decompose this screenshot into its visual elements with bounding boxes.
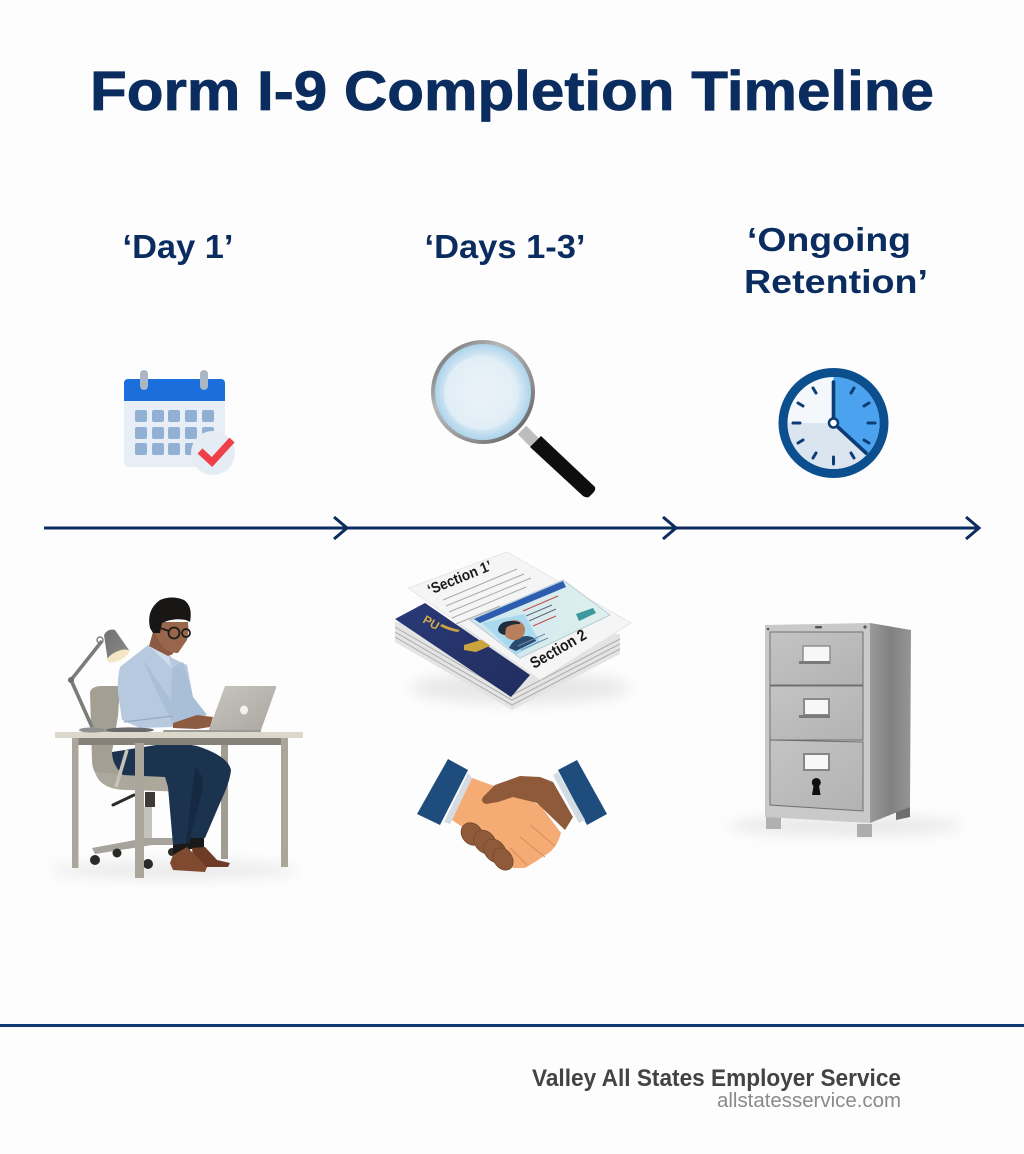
calendar header	[124, 379, 225, 401]
keyhole	[812, 778, 821, 795]
handle collar	[522, 430, 535, 443]
check badge	[191, 431, 235, 475]
clock face	[788, 377, 880, 469]
heading: Ongoing Retention	[744, 221, 928, 300]
back shoe	[192, 847, 230, 867]
passport lettering: PU	[420, 612, 442, 633]
middle label holder	[799, 699, 830, 718]
right shirt cuff	[553, 772, 585, 823]
illustration: stack of I-9 documents	[395, 552, 631, 710]
illustration: handshake	[417, 759, 607, 874]
heading: Day 1: ‘Day 1’	[122, 228, 234, 265]
section paper	[408, 552, 631, 680]
footer website: allstatesservice.com	[717, 1090, 901, 1112]
front shoe	[170, 847, 207, 872]
handle	[530, 436, 595, 497]
trousers	[112, 742, 231, 845]
hands on keyboard	[173, 715, 213, 729]
desk top	[55, 732, 303, 738]
notebook	[106, 727, 154, 733]
top drawer	[770, 632, 863, 685]
ID portrait	[498, 620, 536, 651]
desk under-frame	[76, 738, 282, 745]
face	[155, 622, 188, 653]
heading: Ongoing Retention: ‘Ongoing	[747, 221, 911, 258]
cabinet front	[765, 623, 870, 823]
desk back leg	[221, 743, 228, 859]
Section 2 label: Section 2	[528, 627, 590, 672]
brown fingers	[457, 818, 517, 874]
calendar date cells	[135, 410, 214, 455]
desk near legs	[72, 738, 288, 878]
socks	[173, 836, 204, 856]
middle drawer	[770, 686, 863, 740]
illustration: filing cabinet	[727, 623, 963, 837]
title: Form I-9 Completion Timeline	[90, 59, 934, 122]
laptop base	[163, 730, 261, 733]
right brown hand	[482, 776, 573, 830]
passport cover	[395, 603, 530, 697]
passport emblem	[464, 639, 492, 652]
ID photo	[482, 614, 540, 655]
ID blue band	[474, 581, 566, 623]
icon: calendar	[124, 370, 235, 475]
heading: Days 1-3: ‘Days 1-3’	[424, 228, 586, 265]
chair base	[90, 792, 176, 869]
clock centre pin	[829, 418, 838, 428]
right cuff	[558, 760, 607, 825]
illustration: person working at desk	[50, 598, 303, 879]
document shadow	[410, 672, 630, 704]
bottom drawer	[770, 740, 863, 811]
desk lamp	[68, 630, 131, 733]
left cuff	[417, 759, 468, 825]
red check mark	[200, 440, 232, 462]
hair	[149, 598, 191, 633]
icon: clock	[778, 368, 888, 478]
floor shadow	[50, 861, 300, 879]
left shirt cuff	[444, 773, 472, 824]
page stack	[395, 622, 620, 710]
chair back	[90, 686, 123, 782]
lower shaded face	[788, 423, 880, 469]
calendar rings	[140, 370, 208, 390]
paper lines	[443, 569, 531, 624]
footer divider	[0, 1024, 1024, 1027]
lens rim	[431, 340, 535, 444]
heading: Ongoing Retention: Retention’	[744, 263, 928, 300]
elapsed time wedge	[834, 377, 879, 456]
top label holder	[799, 646, 830, 664]
calendar page	[124, 379, 225, 467]
laptop logo	[240, 706, 248, 714]
cabinet side	[870, 623, 911, 823]
chair armrest	[116, 750, 127, 787]
ID stamp	[576, 608, 596, 621]
left light hand	[452, 778, 561, 868]
shirt	[118, 645, 207, 728]
ID details	[518, 596, 558, 650]
neck	[149, 632, 173, 656]
glasses	[160, 628, 190, 638]
laptop screen	[208, 686, 276, 732]
cabinet shadow	[727, 816, 963, 836]
ID card	[470, 580, 610, 658]
icon: magnifying glass	[431, 340, 595, 497]
bottom label holder	[804, 754, 829, 770]
footer company name: Valley All States Employer Service	[532, 1065, 901, 1092]
Section 1 label: ‘Section 1’	[425, 557, 495, 599]
chair seat	[95, 772, 203, 792]
lens glass	[435, 344, 531, 440]
top lock	[767, 625, 867, 630]
timeline arrow	[44, 517, 979, 539]
cabinet feet	[766, 807, 910, 837]
clock hands	[834, 382, 866, 453]
clock ring	[778, 368, 888, 478]
clock ticks	[793, 382, 875, 464]
